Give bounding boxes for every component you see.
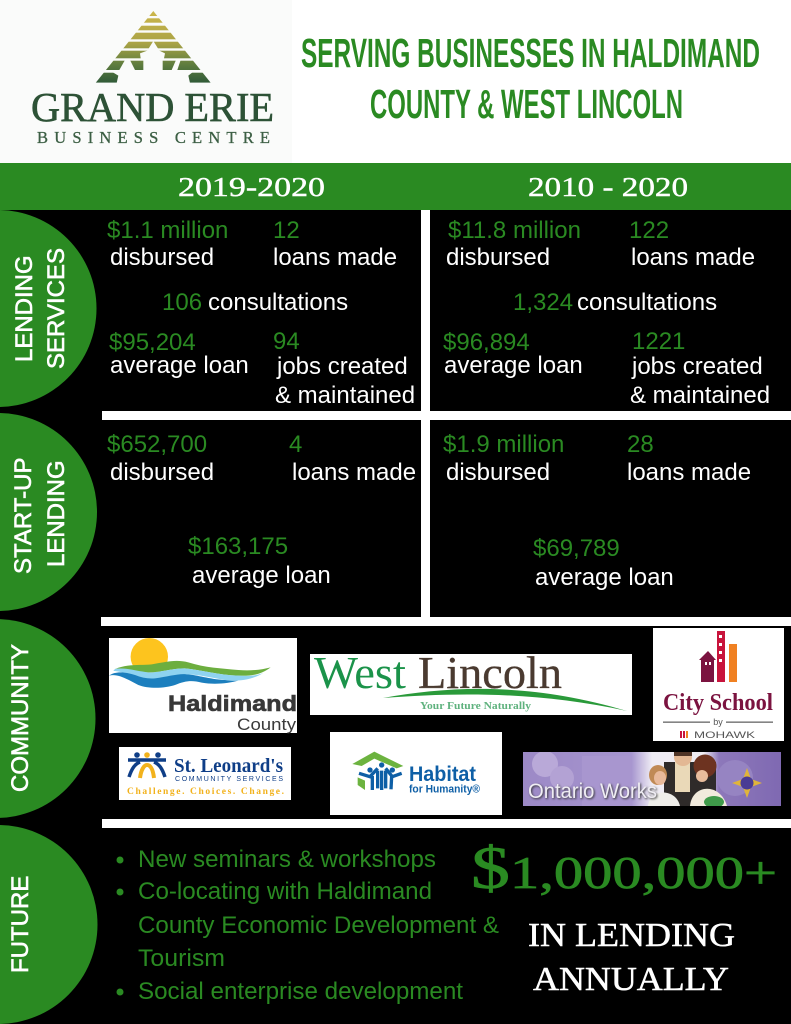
logo: Ontario Works [523,752,781,806]
panel: start-up lending 2019-2020: 4 [289,431,302,458]
callout: $1,000,000+ in lending annually: IN LENDING [528,917,735,954]
panel: start-up lending 2010-2020: disbursed [446,459,550,486]
logo: Grand Erie Business Centre [32,11,272,144]
black background [0,210,791,1024]
panel: start-up lending 2010-2020 [443,431,751,591]
side label: lending services: SERVICES [43,248,70,369]
panel: lending services 2019-2020: loans made [273,244,397,271]
side label: start-up lending [0,413,97,611]
panel: lending services 2010-2020: jobs created [631,353,763,380]
panel: start-up lending 2019-2020 [107,431,416,589]
logo: Ontario Works: Ontario Works [528,780,657,803]
panel: start-up lending 2010-2020: average loan [535,564,674,591]
future bullet list: County Economic Development & [138,912,499,939]
future bullet list: Tourism [138,945,225,972]
logo: West Lincoln: Your Future Naturally [420,700,532,712]
panel: lending services 2010-2020: 1,324 [513,289,573,316]
side label: community [0,619,96,818]
logo: Habitat for Humanity: Habitat [409,763,476,786]
panel: lending services 2010-2020: $11.8 million [448,217,581,244]
logo: Habitat for Humanity [330,732,502,815]
logo: City School by Mohawk: City School [663,690,773,716]
panel: lending services 2019-2020: 106 [162,289,202,316]
logo: St. Leonard's Community Services: St. Leonard's [174,755,283,777]
logo: City School by Mohawk: by [713,717,723,727]
panel: start-up lending 2010-2020: $69,789 [533,535,620,562]
logo: Grand Erie Business Centre: GRAND ERIE [31,84,274,130]
logo: West Lincoln [310,647,632,715]
side label: lending services: LENDING [11,255,38,362]
logo: Haldimand County: Haldimand [168,691,297,716]
callout: $1,000,000+ in lending annually: $1,000,000+ [471,835,777,901]
panel: lending services 2010-2020: & maintained [630,382,770,409]
side label: future: FUTURE [7,876,34,973]
callout: $1,000,000+ in lending annually [471,835,777,998]
future bullet list: Co-locating with Haldimand [138,878,432,905]
future bullet list: New seminars & workshops [138,846,436,873]
panel: start-up lending 2019-2020: disbursed [110,459,214,486]
logo: St. Leonard's Community Services: Challenge. Choices. Change. [127,787,284,797]
logo: Grand Erie Business Centre: BUSINESS CENTRE [37,128,270,147]
logo: City School by Mohawk [653,628,784,741]
panel: lending services 2010-2020 [443,217,770,409]
panel: start-up lending 2019-2020: $163,175 [188,533,288,560]
panel: lending services 2019-2020: $1.1 million [107,217,228,244]
panel: start-up lending 2019-2020: $652,700 [107,431,207,458]
panel: start-up lending 2010-2020: $1.9 million [443,431,564,458]
panel: lending services 2019-2020: jobs created [276,353,408,380]
header bar with periods: 2010 - 2020 [528,172,688,202]
logo: St. Leonard's Community Services [119,747,291,800]
header bar with periods [0,163,791,210]
logo: Habitat for Humanity: for Humanity® [409,784,480,796]
title [301,30,760,127]
logo: City School by Mohawk: MOHAWK [694,730,755,740]
panel: start-up lending 2010-2020: loans made [627,459,751,486]
panel: lending services 2010-2020: average loan [444,352,583,379]
panel: lending services 2010-2020: 122 [629,217,669,244]
panel: lending services 2010-2020: disbursed [446,244,550,271]
side label: community: COMMUNITY [7,644,34,792]
panel: lending services 2019-2020: $95,204 [109,329,196,356]
callout: $1,000,000+ in lending annually: ANNUALLY [533,961,729,998]
panel: start-up lending 2019-2020: average loan [192,562,331,589]
side label: lending services [0,210,96,407]
panel: lending services 2019-2020: & maintained [275,382,415,409]
future bullet list [116,846,499,1005]
logo: West Lincoln: Lincoln [418,647,562,698]
panel: start-up lending 2010-2020: 28 [627,431,654,458]
panel: lending services 2010-2020: consultations [577,289,717,316]
side label: future [0,825,98,1024]
panel: start-up lending 2019-2020: loans made [292,459,416,486]
panel: lending services 2019-2020 [107,217,415,409]
panel: lending services 2019-2020: 94 [273,328,300,355]
logo: Haldimand County: County [237,716,297,734]
logo: West Lincoln: West [314,647,406,698]
side label: start-up lending: LENDING [43,460,70,567]
panel: lending services 2019-2020: consultations [208,289,348,316]
panel: lending services 2019-2020: disbursed [110,244,214,271]
panel: lending services 2010-2020: loans made [631,244,755,271]
panel: lending services 2010-2020: 1221 [632,328,685,355]
panel: lending services 2019-2020: average loan [110,352,249,379]
header bar with periods: 2019-2020 [178,172,325,202]
side label: start-up lending: START-UP [10,458,37,574]
panel: lending services 2019-2020: 12 [273,217,300,244]
panel: lending services 2010-2020: $96,894 [443,329,530,356]
future bullet list: Social enterprise development [138,978,463,1005]
logo: St. Leonard's Community Services: COMMUNITY SERVICES [175,776,283,783]
logo: Haldimand County [109,638,297,734]
white dividers [101,210,791,828]
